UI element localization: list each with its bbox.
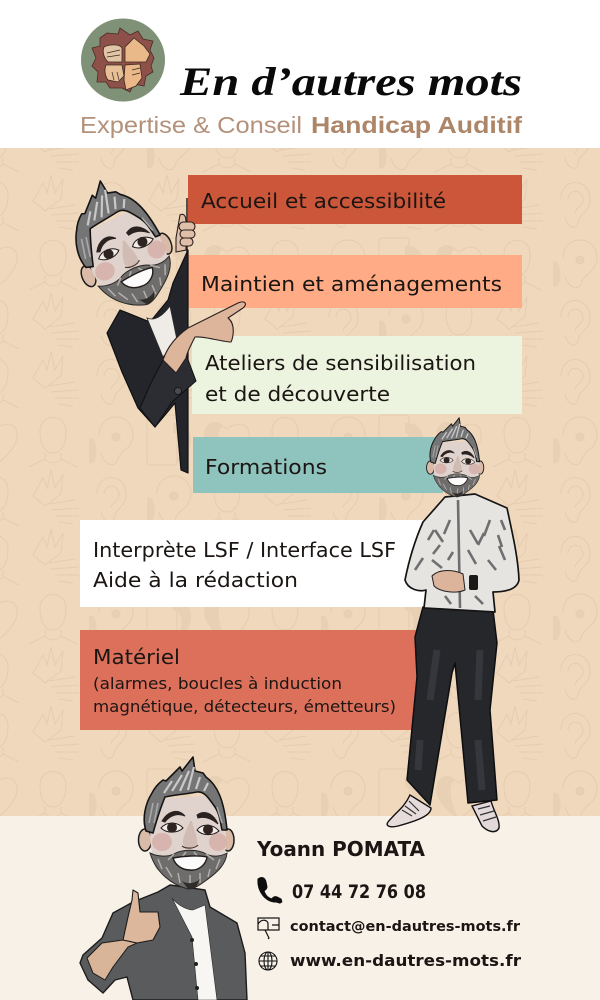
character: man thumbs up bbox=[80, 757, 247, 1000]
thumbs up hand bbox=[123, 890, 160, 943]
panel: maintien et aménagements bbox=[188, 255, 522, 308]
forearm bbox=[87, 940, 137, 980]
jacket bbox=[107, 250, 188, 473]
trousers bbox=[407, 607, 497, 805]
panel: matériel: Matériel bbox=[93, 645, 180, 669]
jacket sleeve bbox=[140, 357, 196, 427]
panel: interprète: Interprète LSF / Interface LSF bbox=[93, 538, 396, 562]
panel: maintien et aménagements: Maintien et aménagements bbox=[201, 272, 502, 296]
icon: globe bbox=[259, 952, 277, 970]
panel: ateliers: Ateliers de sensibilisation bbox=[205, 351, 476, 375]
subtitle bbox=[80, 112, 522, 138]
panel: formations: Formations bbox=[205, 455, 327, 479]
subtitle: Expertise & Conseil bbox=[80, 112, 302, 138]
head bbox=[138, 757, 234, 889]
panel: accueil et accessibilité: Accueil et accessibilité bbox=[201, 189, 446, 213]
panel: ateliers bbox=[192, 336, 522, 414]
clasped hands and watch bbox=[432, 570, 465, 592]
panel: formations bbox=[193, 437, 443, 493]
panel: ateliers: et de découverte bbox=[205, 382, 390, 406]
beige background panel bbox=[0, 148, 600, 816]
panel: matériel: (alarmes, boucles à induction bbox=[93, 674, 342, 693]
head bbox=[50, 165, 190, 324]
logo: gear and joined hands bbox=[81, 18, 165, 102]
left shoe bbox=[387, 795, 431, 827]
email: contact@en-dautres-mots.fr bbox=[290, 919, 520, 935]
phone number: 07 44 72 76 08 bbox=[292, 881, 426, 903]
right shoe bbox=[472, 801, 499, 832]
contact name: Yoann POMATA bbox=[256, 837, 426, 861]
panel: interprète bbox=[80, 520, 425, 607]
white tee bbox=[147, 306, 177, 357]
head bbox=[426, 418, 484, 497]
character: man peeking and pointing bbox=[50, 165, 245, 473]
panel: matériel: magnétique, détecteurs, émetteurs) bbox=[93, 697, 396, 716]
gripping hand bbox=[176, 214, 195, 252]
website: www.en-dautres-mots.fr bbox=[290, 951, 521, 970]
background icon pattern bbox=[0, 148, 600, 816]
footer background bbox=[0, 816, 600, 1000]
panel: interprète: Aide à la rédaction bbox=[93, 568, 298, 592]
icon: phone bbox=[258, 878, 282, 903]
subtitle: Handicap Auditif bbox=[311, 112, 522, 138]
white tee bbox=[172, 898, 217, 1000]
overshirt bbox=[80, 885, 247, 1000]
panel: matériel bbox=[80, 630, 420, 730]
shirt buttons bbox=[190, 938, 199, 990]
patterned shirt bbox=[405, 494, 519, 612]
header background bbox=[0, 0, 600, 148]
pointing arm bbox=[163, 302, 245, 373]
icon: mailbox bbox=[258, 918, 279, 939]
title: En d’autres mots bbox=[179, 59, 522, 104]
character: man standing bbox=[387, 418, 519, 832]
panel: accueil et accessibilité bbox=[188, 175, 522, 224]
jacket button bbox=[174, 388, 182, 394]
